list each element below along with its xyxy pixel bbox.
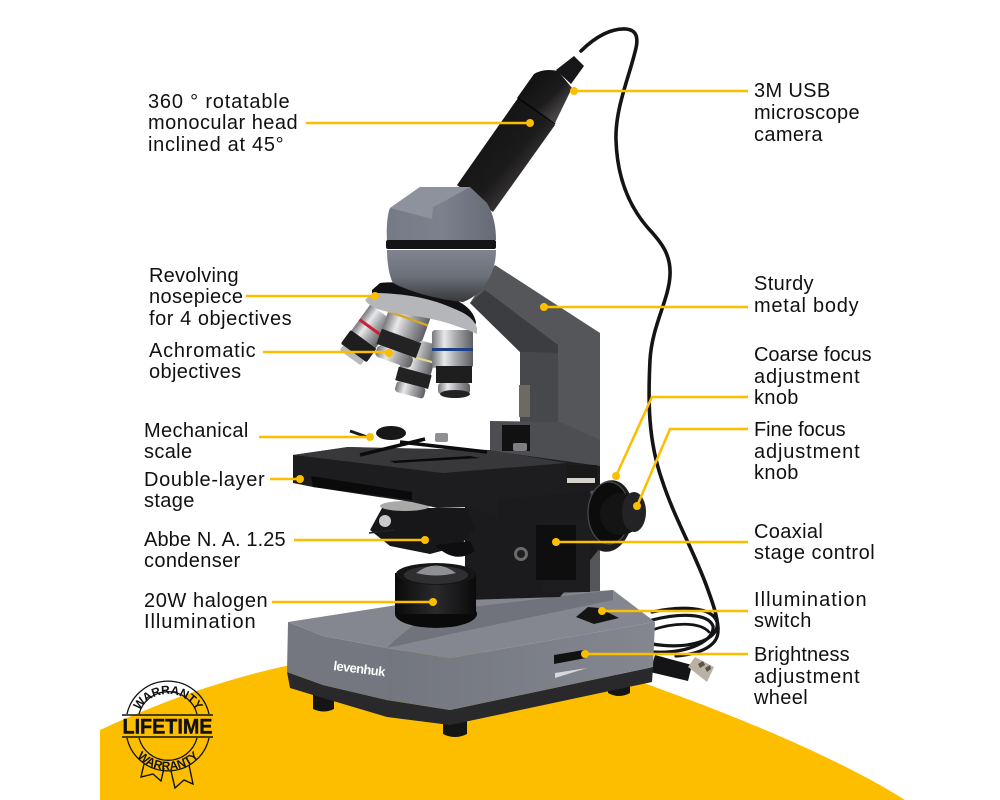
callout: metal body: Sturdy	[754, 273, 814, 295]
callout: objectives: Achromatic	[149, 340, 256, 362]
head	[386, 187, 496, 302]
stage	[293, 426, 600, 517]
callout: brightness wheel: wheel	[753, 687, 808, 709]
callout: fine focus	[633, 419, 860, 510]
callout: nosepiece: Revolving	[149, 265, 239, 287]
ribbon tails	[141, 764, 193, 788]
microscope	[287, 29, 718, 737]
left base face	[287, 622, 387, 700]
callout: metal body	[540, 273, 859, 317]
callout: condenser: Abbe N. A. 1.25	[144, 529, 286, 551]
callout: halogen illumination: 20W halogen	[144, 590, 268, 612]
callout: brightness wheel	[581, 644, 860, 709]
stage body	[293, 447, 600, 517]
objectives	[337, 302, 473, 400]
base top face	[288, 590, 655, 658]
callout: objectives	[149, 340, 393, 383]
callout: brightness wheel: adjustment	[754, 666, 860, 688]
callout: monocular head: 360 ° rotatable	[148, 91, 290, 113]
badge: lifetime warranty: LIFETIME	[122, 716, 212, 738]
callout: USB camera: 3M USB	[754, 80, 831, 102]
USB cable	[581, 29, 718, 656]
stage top face	[293, 447, 567, 473]
callout: nosepiece: nosepiece	[149, 286, 243, 308]
callout: stage: Double-layer	[144, 469, 265, 491]
slide holder knob	[376, 426, 406, 440]
right base face	[387, 622, 655, 710]
stage slot	[311, 476, 412, 500]
objective: gold ring	[372, 302, 431, 369]
callout: coaxial control: Coaxial	[754, 521, 823, 543]
callout: monocular head: inclined at 45°	[148, 134, 284, 156]
callout: monocular head	[148, 91, 534, 156]
USB plug	[650, 655, 714, 682]
callout: illumination switch: switch	[754, 610, 812, 632]
yellow background arc	[100, 650, 905, 800]
callout: metal body: metal body	[754, 295, 859, 317]
lower arm and pillar	[470, 265, 600, 597]
base bottom trim	[287, 667, 653, 725]
callout: coarse focus	[612, 344, 872, 480]
callout: coaxial control: stage control	[754, 542, 875, 564]
callout: brightness wheel: Brightness	[754, 644, 850, 666]
nosepiece	[365, 282, 477, 334]
callout: mechanical scale: Mechanical	[144, 420, 249, 442]
focus block	[465, 490, 600, 600]
focus knobs	[580, 477, 646, 555]
callout: USB camera: camera	[754, 124, 823, 146]
callout: USB camera: microscope	[754, 102, 860, 124]
base	[287, 590, 655, 737]
callout: halogen illumination	[144, 590, 437, 633]
badge: lifetime warranty	[122, 680, 213, 790]
callout: mechanical scale	[144, 420, 374, 463]
callout: coaxial control	[552, 521, 875, 564]
brightness wheel	[554, 650, 586, 664]
callout: objectives: objectives	[149, 361, 241, 383]
feet	[313, 680, 630, 737]
callout: nosepiece: for 4 objectives	[149, 308, 292, 330]
callout: condenser: condenser	[144, 550, 241, 572]
callout: coarse focus: knob	[754, 387, 799, 409]
callout: fine focus: adjustment	[754, 441, 860, 463]
callout: illumination switch	[598, 589, 867, 632]
callout: coarse focus: adjustment	[754, 366, 860, 388]
callout: halogen illumination: Illumination	[144, 611, 256, 633]
callout: stage: stage	[144, 490, 195, 512]
callout: illumination switch: Illumination	[754, 589, 867, 611]
badge: lifetime warranty: WARRANTY	[132, 686, 204, 709]
objective: yellow ring	[392, 337, 440, 400]
callout: monocular head: monocular head	[148, 112, 298, 134]
camera tube	[457, 56, 584, 212]
callout: fine focus: knob	[754, 462, 799, 484]
callout: nosepiece	[149, 265, 379, 330]
condenser	[369, 501, 475, 557]
collector lens	[395, 563, 477, 628]
stage clip arms	[360, 439, 487, 455]
badge: lifetime warranty: WARRANTY	[138, 750, 197, 770]
callout: coarse focus: Coarse focus	[754, 344, 872, 366]
logo: levenhuk	[333, 658, 387, 679]
illumination switch	[576, 607, 619, 624]
callout: stage	[144, 469, 304, 512]
objective: blue ring	[432, 330, 473, 398]
callout: fine focus: Fine focus	[754, 419, 846, 441]
objective: red ring	[337, 304, 395, 367]
callout: mechanical scale: scale	[144, 441, 192, 463]
callout: condenser	[144, 529, 429, 572]
callout: USB camera	[570, 80, 860, 146]
brightness wedge	[555, 668, 587, 678]
